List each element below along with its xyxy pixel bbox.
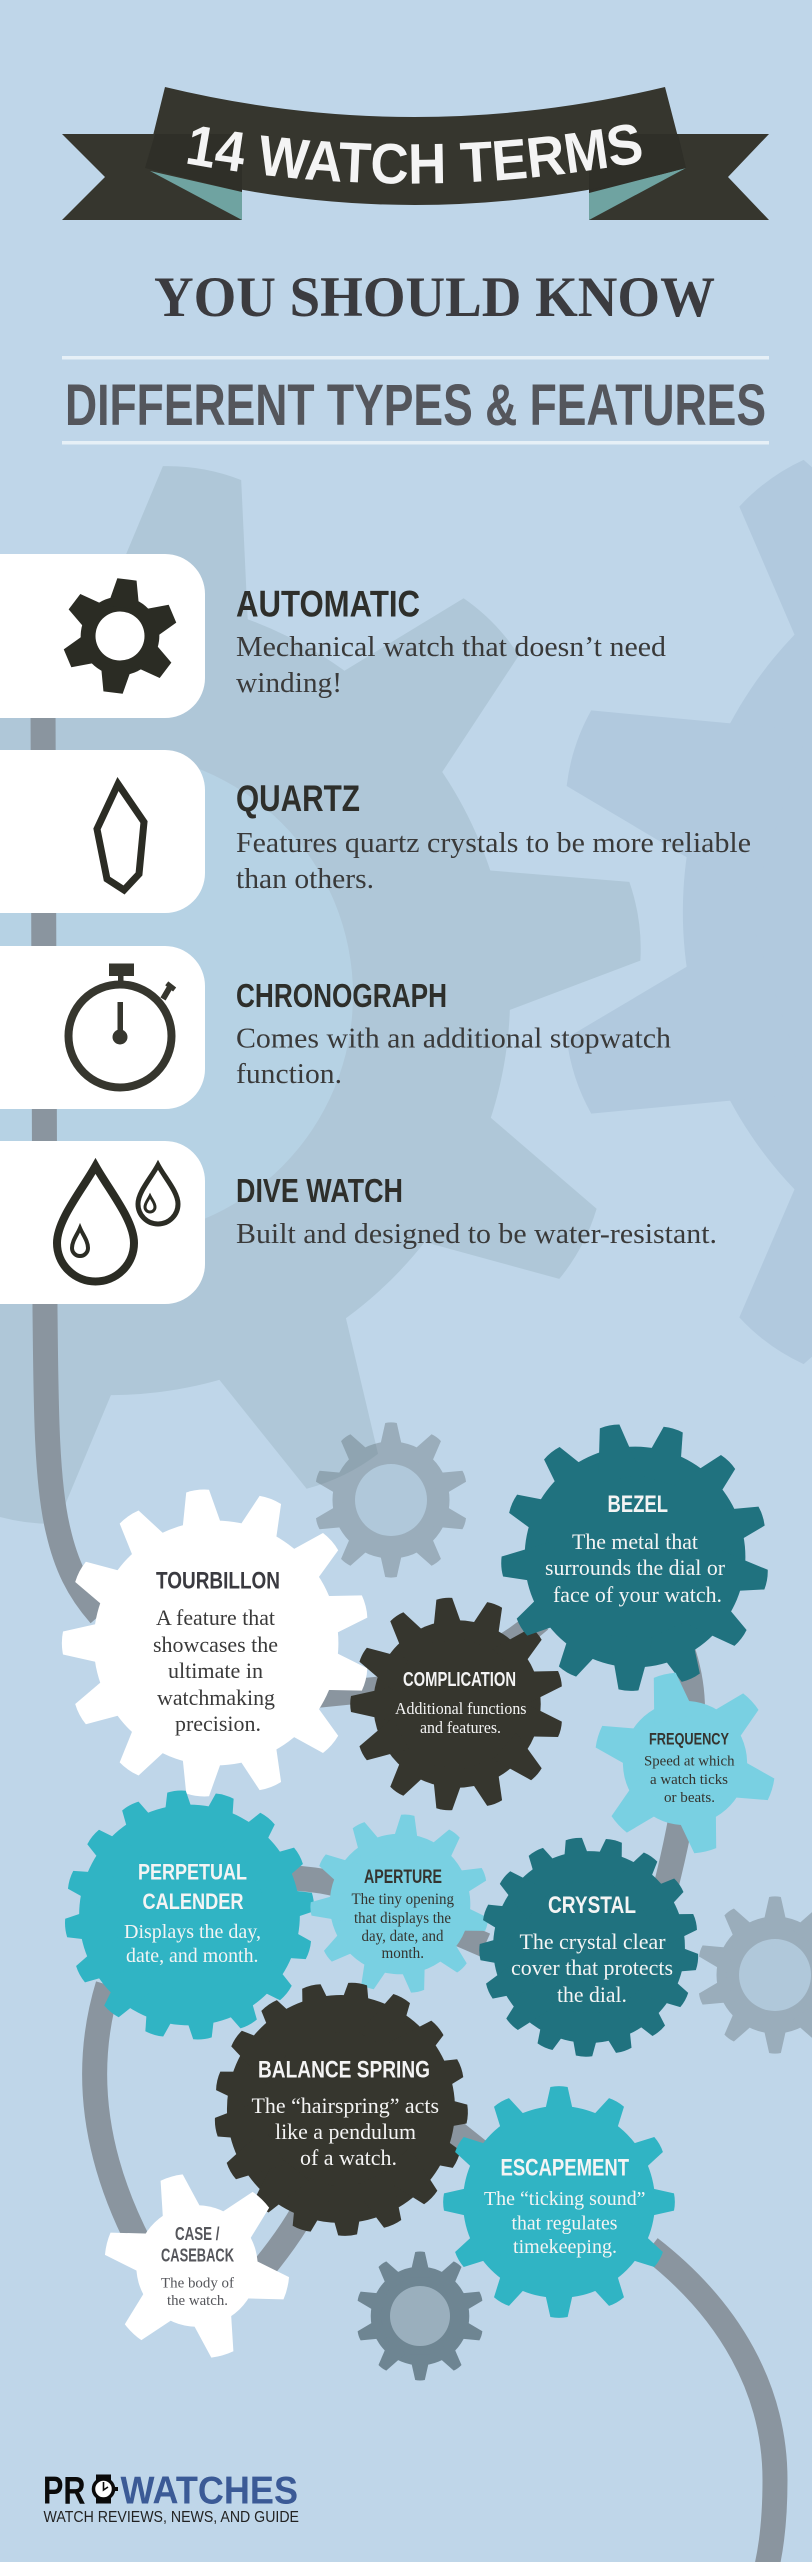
gear: escapement [443, 2086, 675, 2318]
card [0, 750, 205, 913]
card [0, 946, 205, 1109]
heading: CHRONOGRAPH [236, 977, 447, 1014]
gear: crystal: The crystal clear [520, 1929, 666, 1954]
gear: right grey [696, 1896, 812, 2054]
gear: case / caseback: The body of [161, 2276, 234, 2292]
description [236, 632, 666, 699]
panel: dive watch [0, 1141, 717, 1304]
description: Comes with an additional stopwatch [236, 1024, 671, 1054]
gear: frequency: or beats. [664, 1790, 715, 1806]
gear: complication: Additional functions [395, 1699, 526, 1718]
decorative gear: upper grey [313, 1422, 469, 1578]
title text: 14 WATCH TERMS [187, 124, 642, 184]
gear: complication: COMPLICATION [403, 1669, 516, 1691]
gear: balance spring: BALANCE SPRING [258, 2056, 430, 2084]
gear: tourbillon [62, 1487, 372, 1799]
description [236, 828, 751, 895]
gear: frequency: a watch ticks [650, 1772, 728, 1788]
heading: QUARTZ [236, 778, 360, 819]
gear: aperture: APERTURE [364, 1867, 442, 1888]
description: Features quartz crystals to be more reliable [236, 828, 751, 859]
gear: frequency: FREQUENCY [649, 1730, 729, 1748]
card [0, 554, 205, 718]
gear: escapement: timekeeping. [513, 2236, 617, 2258]
gear: escapement: ESCAPEMENT [500, 2154, 629, 2182]
gear: tourbillon: TOURBILLON [156, 1568, 280, 1594]
logo watch icon [94, 2474, 118, 2504]
icon: stopwatch [68, 964, 176, 1088]
gear: complication [350, 1596, 565, 1812]
gear: crystal: cover that protects [511, 1955, 673, 1980]
gear: aperture: day, date, and [362, 1928, 444, 1945]
gear: case / caseback [84, 2152, 310, 2380]
title ribbon [62, 87, 769, 220]
gear: crystal [464, 1823, 714, 2073]
gear: bezel: The metal that [572, 1529, 698, 1554]
description: function. [236, 1059, 342, 1090]
logo wordmark blue: WATCHES [120, 2470, 298, 2512]
background gear: right [548, 378, 812, 1446]
background gear: large left [0, 376, 729, 1614]
description: winding! [236, 668, 342, 699]
gear: tourbillon: watchmaking [157, 1685, 275, 1710]
description: Built and designed to be water-resistant. [236, 1219, 717, 1250]
gear: frequency [578, 1654, 792, 1872]
logo wordmark: PR [43, 2470, 86, 2512]
gear: case / caseback: CASEBACK [161, 2246, 234, 2266]
description: than others. [236, 864, 374, 895]
gear: balance spring: of a watch. [300, 2145, 397, 2170]
gear: perpetual calender: Displays the day, [124, 1921, 261, 1943]
logo [43, 2470, 299, 2526]
gear: perpetual calender [52, 1778, 327, 2052]
gear: bezel: surrounds the dial or [545, 1555, 726, 1580]
gear: balance spring [186, 1955, 496, 2264]
gear: frequency: Speed at which [644, 1754, 735, 1770]
icon: water drops [57, 1165, 178, 1282]
gear: aperture [302, 1807, 498, 2002]
gear: aperture: month. [382, 1945, 424, 1962]
ribbon left fold [150, 171, 242, 220]
gear: crystal: CRYSTAL [548, 1892, 636, 1919]
ribbon main band [145, 87, 686, 205]
ribbon left shade [145, 134, 242, 192]
logo tagline: WATCH REVIEWS, NEWS, AND GUIDE [44, 2509, 299, 2526]
card [0, 1141, 205, 1304]
gear: tourbillon: A feature that [156, 1605, 275, 1630]
gear: dark grey [355, 2252, 485, 2380]
gear: bezel [476, 1400, 794, 1716]
gear: bezel: BEZEL [608, 1491, 668, 1518]
gear: bezel: face of your watch. [553, 1582, 722, 1607]
gear: aperture: that displays the [354, 1910, 451, 1927]
description: Mechanical watch that doesn’t need [236, 632, 666, 663]
ribbon left tail [62, 134, 242, 220]
gear: complication: and features. [420, 1718, 501, 1737]
panel: chronograph [0, 946, 671, 1109]
gear: escapement: that regulates [512, 2212, 618, 2234]
panel: automatic [0, 554, 666, 718]
description [236, 1024, 671, 1090]
gear: aperture: The tiny opening [352, 1891, 454, 1908]
subtitle: YOU SHOULD KNOW [154, 266, 715, 329]
gear: tourbillon: precision. [175, 1711, 261, 1736]
gear: balance spring: The “hairspring” acts [252, 2093, 439, 2118]
ribbon right fold [589, 168, 686, 220]
gear: perpetual calender: PERPETUAL [138, 1860, 247, 1884]
gear: case / caseback: the watch. [167, 2293, 228, 2309]
gear: crystal: the dial. [557, 1982, 627, 2007]
gear: case / caseback: CASE / [175, 2224, 220, 2244]
gear: perpetual calender: CALENDER [142, 1889, 244, 1914]
heading: DIVE WATCH [236, 1172, 403, 1209]
ribbon right tail [589, 134, 769, 220]
panel: quartz [0, 750, 751, 913]
heading: AUTOMATIC [236, 584, 420, 624]
gear: escapement: The “ticking sound” [484, 2188, 646, 2210]
connector pipes [43, 700, 775, 2562]
icon: crystal [97, 784, 144, 890]
gear: tourbillon: showcases the [153, 1632, 278, 1657]
ribbon right shade [589, 134, 686, 193]
gear: perpetual calender: date, and month. [126, 1945, 258, 1967]
gear: tourbillon: ultimate in [168, 1658, 263, 1683]
gear: balance spring: like a pendulum [275, 2119, 416, 2144]
icon: gear [56, 572, 184, 700]
